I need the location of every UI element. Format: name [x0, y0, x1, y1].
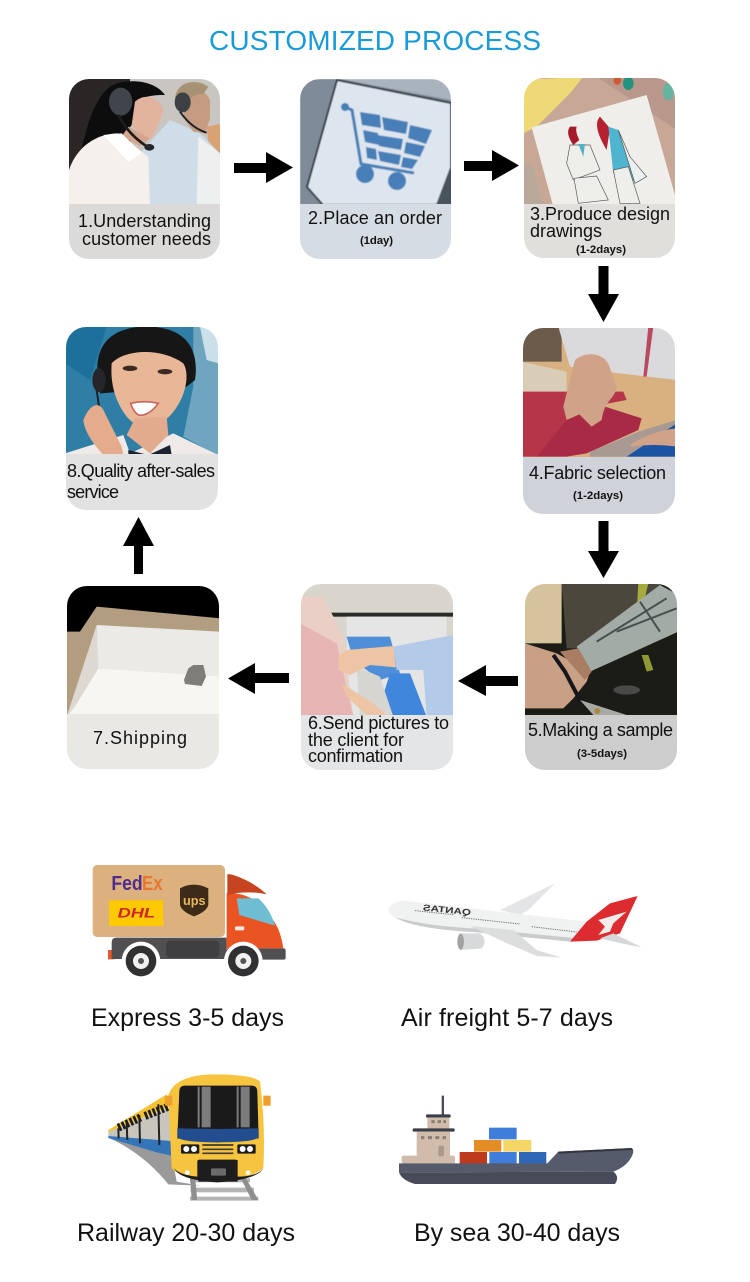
panel: step 4 fabric selection: [522, 327, 677, 514]
caption: step 8: 8.Quality after-sales: [67, 461, 215, 481]
caption band: [301, 715, 453, 770]
logo: FedEx: Ex: [142, 872, 163, 895]
panel: step 2 place an order: [300, 79, 451, 259]
caption: step 2: (1day): [360, 235, 393, 247]
arrow: step 6 to step 7: [228, 663, 289, 694]
caption: step 6: the client for: [308, 730, 404, 750]
caption: step 1: [78, 211, 211, 249]
title: CUSTOMIZED PROCESS: [209, 25, 541, 56]
logo: UPS: ups: [183, 894, 206, 908]
caption band: [523, 457, 675, 514]
caption: step 1: 1.Understanding: [78, 211, 211, 231]
icon: shopping cart: [341, 103, 432, 190]
panel: step 3 produce design drawings: [523, 77, 677, 258]
logo: FedEx: Fed: [111, 872, 143, 895]
arrow: step 4 to step 5: [588, 521, 619, 578]
photo: garment in cardboard box: [67, 585, 220, 717]
caption band: [66, 454, 218, 510]
airline name: QANTAS: [422, 902, 471, 917]
caption: step 4: [529, 463, 666, 502]
panel: step 1 understanding customer needs: [67, 77, 223, 259]
caption: step 3: (1-2days): [576, 244, 626, 256]
caption: step 5: 5.Making a sample: [528, 720, 673, 740]
icon: delivery truck: [93, 865, 286, 980]
arrow: step 7 to step 8: [123, 517, 154, 574]
caption: step 6: 6.Send pictures to: [308, 713, 449, 733]
label: railway: Railway 20-30 days: [77, 1219, 295, 1247]
icon: airplane: [388, 883, 642, 958]
caption: step 2: 2.Place an order: [308, 208, 442, 228]
caption: step 4: 4.Fabric selection: [529, 463, 666, 483]
caption band: [300, 204, 451, 259]
caption: step 4: (1-2days): [573, 490, 623, 502]
caption: step 3: [530, 204, 670, 256]
arrow: step 2 to step 3: [464, 150, 519, 181]
train shadow and track: [108, 1138, 258, 1201]
caption: step 5: (3-5days): [577, 748, 627, 760]
caption band: [525, 715, 677, 770]
caption: step 3: drawings: [530, 221, 602, 241]
photo: hands holding red fabric: [522, 327, 677, 458]
panel: step 8 after-sales service: [65, 327, 220, 510]
photo: fashion sketches: [523, 77, 677, 207]
caption: step 6: confirmation: [308, 746, 403, 766]
caption: step 2: [308, 208, 442, 247]
panel: step 6 send pictures to the client: [300, 583, 455, 770]
caption: step 8: service: [67, 482, 119, 502]
caption: step 3: 3.Produce design: [530, 204, 670, 224]
logo: DHL: DHL: [118, 905, 155, 921]
photo: keyboard key with shopping cart: [300, 79, 451, 205]
photo: tailor cutting with scissors: [525, 583, 678, 715]
photo: smiling agent with headset: [65, 327, 220, 457]
arrow: step 5 to step 6: [458, 665, 518, 696]
caption band: [524, 204, 675, 258]
caption: step 6: [308, 713, 449, 766]
label: air freight: Air freight 5-7 days: [401, 1004, 613, 1032]
icon: train: [108, 1074, 271, 1201]
photo: call centre agents: [67, 77, 223, 207]
label: by sea: By sea 30-40 days: [414, 1219, 620, 1247]
photo: dress fitting on mannequin: [300, 583, 455, 717]
caption: step 5: [528, 720, 673, 760]
caption: step 1: customer needs: [82, 229, 211, 249]
arrow: step 3 to step 4: [588, 266, 619, 322]
caption band: [69, 204, 220, 259]
panel: step 7 shipping: [67, 585, 220, 769]
label: express: Express 3-5 days: [91, 1004, 284, 1032]
icon: container ship: [399, 1096, 633, 1184]
caption: step 8: [67, 461, 215, 502]
caption: step 7: 7.Shipping: [93, 728, 187, 748]
caption band: [67, 714, 219, 769]
logo: UPS: [180, 885, 208, 916]
panel: step 5 making a sample: [525, 583, 678, 770]
arrow: step 1 to step 2: [234, 152, 293, 183]
